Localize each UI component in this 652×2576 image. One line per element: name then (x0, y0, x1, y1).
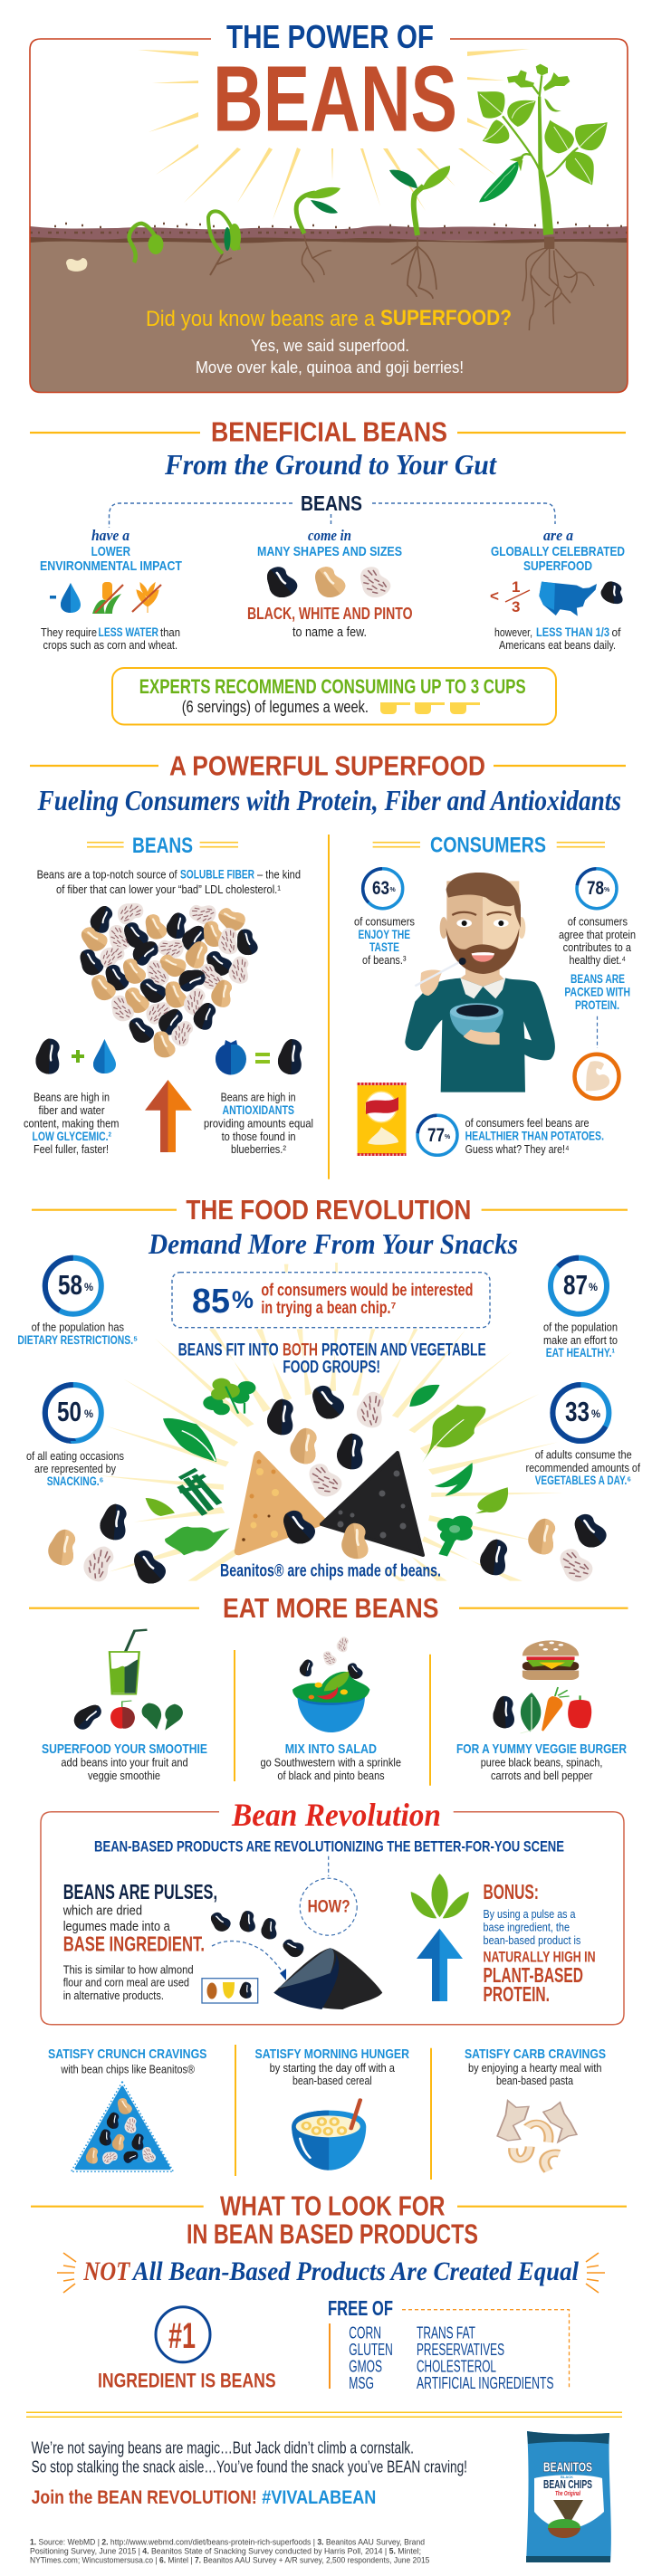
heading rule (30, 765, 626, 767)
column: burger: puree black beans, spinach, (481, 1756, 602, 1770)
stat: 58 percent: % (84, 1281, 93, 1293)
column: burger (456, 1640, 627, 1782)
list: free of: GMOS (349, 2357, 382, 2375)
text: beans are pulses: BEANS ARE PULSES, (63, 1880, 217, 1903)
beans label: BEANS (301, 491, 362, 515)
hero headline (146, 306, 512, 331)
text: bonus: BONUS: (484, 1880, 539, 1903)
column: smoothie (42, 1630, 207, 1782)
column: carb cravings: bean-based pasta (496, 2074, 574, 2087)
icon: tan bean (309, 552, 358, 604)
column: crunch: with bean chips like Beanitos® (61, 2063, 195, 2076)
text: low glycemic (24, 1091, 120, 1156)
heading (187, 2190, 478, 2250)
column: burger: carrots and bell pepper (491, 1769, 593, 1782)
fraction: less than one third: < (490, 587, 499, 605)
icon: broccoli (437, 1516, 473, 1555)
title: the power of: THE POWER OF (226, 18, 434, 55)
column: superfood: are a (543, 527, 573, 544)
icon: crossed corn (92, 582, 123, 614)
stat: 63 percent: of consumers (354, 915, 415, 929)
callout: experts recommend: (6 servings) of legumes a week. (182, 698, 369, 716)
stat: 63 percent: % (389, 887, 397, 893)
stat: 87 percent (543, 1258, 618, 1360)
column: lower impact: LOWER (91, 544, 130, 559)
list: free of: FREE OF (328, 2296, 393, 2320)
section: what to look for (31, 2190, 627, 2392)
subheading: All Bean-Based Products Are Created Equal (131, 2256, 580, 2286)
panel border (41, 1812, 624, 2025)
text: low glycemic: fiber and water (38, 1103, 105, 1117)
callout: 85 percent: of consumers would be interested (261, 1282, 473, 1301)
fraction: less than one third: 3 (512, 598, 520, 615)
stat: 78 percent (559, 869, 636, 1048)
closing text: So stop stalking the snack aisle…You’ve found the snack you’ve BEAN craving! (32, 2458, 467, 2476)
text: beans are pulses: BASE INGREDIENT. (63, 1932, 205, 1956)
text: bonus: PLANT-BASED (484, 1963, 583, 1987)
icon: measuring cups (380, 702, 480, 714)
list: free of: CORN (349, 2323, 381, 2342)
panel title: Bean Revolution (231, 1797, 441, 1833)
panel: consumers (354, 834, 636, 1156)
icon: blueberry equals bean (216, 1032, 310, 1085)
stat: 78 percent: PROTEIN. (575, 998, 619, 1012)
how callout (300, 1856, 357, 1935)
icon: black bean (590, 575, 628, 611)
list: free of: TRANS FAT (417, 2323, 475, 2342)
icon: seed (66, 258, 87, 272)
closing text (32, 2439, 467, 2476)
column: shapes and sizes: MANY SHAPES AND SIZES (257, 544, 402, 559)
text: food groups: PROTEIN AND VEGETABLE (321, 1340, 486, 1360)
stat: 78 percent: healthy diet.⁴ (569, 953, 626, 967)
text: low glycemic: Feel fuller, faster! (34, 1142, 109, 1156)
callout: experts recommend: EXPERTS RECOMMEND CONSUMING UP TO 3 CUPS (139, 675, 526, 698)
subheading: From the Ground to Your Gut (164, 448, 497, 481)
stat: 78 percent: 78 (587, 878, 604, 899)
stat: 87 percent: make an effort to (543, 1333, 618, 1347)
stat: 63 percent: TASTE (369, 940, 399, 954)
icon: sprout 2 (208, 211, 241, 275)
icon: sprout 4 (389, 166, 450, 299)
icon: parsley (203, 1379, 255, 1415)
footer (26, 2412, 622, 2566)
product: bean chip bag: BEANITOS (543, 2460, 592, 2476)
column: superfood: LESS THAN 1/3 (536, 625, 609, 639)
stat: 87 percent: EAT HEALTHY.¹ (546, 1346, 615, 1360)
hero subtext: Yes, we said superfood. (251, 337, 409, 355)
title: beans: BEANS (213, 47, 457, 150)
text: low glycemic: Beans are high in (34, 1091, 110, 1104)
how callout: HOW? (308, 1898, 350, 1917)
stat: 58 percent (17, 1258, 138, 1347)
heading: THE FOOD REVOLUTION (186, 1194, 471, 1226)
text: food groups (178, 1340, 486, 1378)
icon: black bean (62, 1695, 107, 1736)
callout: experts recommend (112, 668, 556, 724)
column: superfood: however, (494, 625, 532, 639)
text: beans are pulses: legumes made into a (63, 1919, 170, 1934)
stat: 50 percent: % (84, 1407, 93, 1420)
column: morning hunger: bean-based cereal (292, 2074, 372, 2087)
footnotes: NYTimes.com; Wincustomersusa.co | 6. Mintel | 7. Beanitos AAU Survey + A/R survey, 2,500 respondents, June 2015 (30, 2556, 429, 2566)
column: shapes and sizes: to name a few. (292, 625, 367, 640)
stat: 50 percent: are represented by (34, 1462, 116, 1475)
column: superfood: of (612, 625, 621, 639)
product: bean chip bag: BLACK (561, 2475, 573, 2479)
column divider (328, 835, 330, 1179)
heading: BENEFICIAL BEANS (211, 415, 447, 447)
column: smoothie: SUPERFOOD YOUR SMOOTHIE (42, 1741, 207, 1757)
fiber text: of fiber that can lower your “bad” LDL cholesterol.¹ (56, 883, 282, 896)
section: a powerful superfood (22, 750, 636, 1179)
stat: 33 percent: 33 (565, 1396, 590, 1427)
fraction: less than one third: 1 (512, 578, 520, 596)
text: beans are pulses: This is similar to how almond (63, 1963, 194, 1977)
icon: black bean (254, 560, 302, 612)
icon: beans to flour (203, 1907, 382, 2009)
stat: 58 percent: 58 (58, 1269, 82, 1301)
chip: tan (235, 1452, 328, 1554)
bean heart (70, 893, 259, 1061)
subheading: NOT (82, 2256, 131, 2286)
icon: bean triangle (71, 2082, 174, 2171)
panel: bean revolution (41, 1797, 624, 2025)
text: bonus: NATURALLY HIGH IN (484, 1950, 596, 1966)
heading: IN BEAN BASED PRODUCTS (187, 2218, 478, 2250)
text: bonus: base ingredient, the (484, 1921, 570, 1934)
stat: 63 percent: ENJOY THE (359, 928, 410, 941)
product: bean chip bag: The Original (555, 2491, 581, 2497)
stat: 50 percent (26, 1385, 124, 1488)
call to action: Join the BEAN REVOLUTION! (32, 2487, 257, 2508)
text: food groups: BOTH (283, 1340, 318, 1360)
icon: black bean (482, 1691, 520, 1737)
column: morning hunger (255, 2046, 409, 2171)
icon: up arrow (145, 1080, 192, 1152)
callout: 85 percent (172, 1273, 490, 1328)
list: free of: PRESERVATIVES (417, 2341, 504, 2359)
column: lower impact: than (160, 625, 180, 639)
icon: cereal bowl (292, 2100, 366, 2171)
stat: 33 percent (525, 1385, 640, 1487)
heading rule (31, 2206, 627, 2208)
text: low glycemic: LOW GLYCEMIC.² (33, 1130, 111, 1143)
text: bonus: PROTEIN. (484, 1982, 550, 2006)
icon: flexed arm (574, 1054, 619, 1099)
hero headline: Did you know beans are a (146, 307, 376, 331)
icon: sprout 3 (296, 187, 340, 282)
stat: 78 percent: % (604, 887, 610, 893)
section: the food revolution (17, 1194, 640, 1599)
stat: 78 percent: BEANS ARE (570, 972, 625, 986)
consumers heading: CONSUMERS (430, 834, 546, 858)
icon: sprout 1 (129, 224, 163, 262)
text: low glycemic: content, making them (24, 1117, 120, 1130)
icon: veggie burger (521, 1640, 591, 1733)
column: superfood: SUPERFOOD (523, 558, 592, 574)
column: crunch: SATISFY CRUNCH CRAVINGS (48, 2046, 206, 2062)
text: bonus (484, 1880, 596, 2006)
illustration: bean chips (235, 1452, 423, 1555)
heading: EAT MORE BEANS (223, 1592, 438, 1624)
stat: 87 percent: 87 (563, 1269, 588, 1301)
column: carb cravings: SATISFY CARB CRAVINGS (465, 2046, 606, 2062)
footnotes: 1. Source: WebMD | 2. http://www.webmd.com/diet/beans-protein-rich-superfoods | 3. Beanitos AAU Survey, Brand (30, 2538, 425, 2548)
heading rule (29, 1608, 628, 1609)
icon: pasta (497, 2101, 577, 2171)
stat: 78 percent: agree that protein (559, 928, 636, 941)
stat: 77 percent: % (445, 1134, 451, 1140)
text: food groups: BEANS FIT INTO (178, 1340, 279, 1360)
call to action: #VIVALABEAN (262, 2487, 376, 2508)
illustration: greens (146, 1379, 508, 1555)
hero subtext (196, 337, 464, 377)
hero subtext: Move over kale, quinoa and goji berries! (196, 358, 464, 377)
stat: 63 percent: 63 (372, 878, 389, 899)
stat: 78 percent: contributes to a (563, 940, 632, 954)
stat: 63 percent (354, 869, 415, 967)
icon: minus water drop (50, 583, 81, 613)
callout: 85 percent: % (232, 1286, 254, 1313)
column: lower impact: crops such as corn and wheat. (43, 638, 177, 652)
stat: 87 percent: of the population (543, 1321, 618, 1334)
panel: hero (30, 18, 628, 393)
fiber text (37, 868, 301, 896)
column: shapes and sizes: come in (308, 527, 351, 544)
icon: ingredient box (202, 1979, 258, 2003)
callout: 85 percent: 85 (192, 1283, 230, 1321)
callout: 85 percent: in trying a bean chip.⁷ (261, 1299, 397, 1318)
footnotes: Positioning Survey, June 2015 | 4. Beanitos State of Snacking Survey conducted by Harris Poll, 2014 | 5. Mintel; (30, 2547, 421, 2557)
column: lower impact: They require (41, 625, 97, 639)
subheading: Demand More From Your Snacks (148, 1227, 518, 1260)
heading rule (30, 432, 626, 434)
column: carb cravings (465, 2046, 606, 2171)
icon: leaves with arrow (411, 1874, 469, 2001)
burst marks (57, 2253, 605, 2293)
beans heading: BEANS (132, 834, 193, 858)
icon: bean plus water (22, 1032, 116, 1084)
product: bean chip bag: BEAN CHIPS (543, 2477, 592, 2491)
column: morning hunger: by starting the day off with a (270, 2061, 396, 2075)
column: salad: of black and pinto beans (277, 1769, 385, 1782)
column: morning hunger: SATISFY MORNING HUNGER (255, 2046, 409, 2062)
icon: asparagus (179, 1469, 219, 1514)
stat: 78 percent: PACKED WITH (564, 986, 630, 999)
section: satisfy cravings (48, 2045, 606, 2180)
column: superfood (490, 527, 628, 652)
icon: green leaf (475, 1487, 508, 1513)
fiber text: – the kind (257, 868, 301, 882)
fraction: less than one third (490, 578, 530, 615)
list: free of: CHOLESTEROL (417, 2357, 496, 2375)
panel: beans (22, 834, 313, 1156)
icon: full bean plant (477, 64, 608, 330)
stat: 58 percent: of the population has (32, 1321, 124, 1334)
badge: number one ingredient (98, 2307, 276, 2391)
column: shapes and sizes (247, 527, 413, 640)
text: beans are pulses: which are dried (62, 1903, 142, 1919)
text: antioxidants: Beans are high in (221, 1091, 296, 1104)
ground soil (30, 223, 628, 393)
list: free of: MSG (349, 2374, 374, 2392)
text: antioxidants: providing amounts equal (204, 1117, 313, 1130)
column: lower impact: ENVIRONMENTAL IMPACT (40, 558, 182, 574)
fiber text: SOLUBLE FIBER (180, 868, 254, 882)
icon: kale leaf (163, 1418, 216, 1462)
column: carb cravings: by enjoying a hearty meal with (468, 2061, 601, 2075)
list: free of (328, 2296, 569, 2392)
text: bonus: bean-based product is (484, 1933, 581, 1947)
text: antioxidants: ANTIOXIDANTS (223, 1103, 294, 1117)
text: beans are pulses: flour and corn meal are used (63, 1976, 189, 1989)
stat: 58 percent: DIETARY RESTRICTIONS.⁵ (17, 1333, 138, 1347)
icon: leaf (409, 1385, 439, 1407)
section: eat more beans (29, 1592, 628, 1786)
list: free of: GLUTEN (349, 2341, 393, 2359)
illustration: man eating beans (405, 873, 555, 1092)
dashed connector (109, 503, 555, 528)
stat: 78 percent: of consumers (568, 915, 628, 929)
footnotes (30, 2538, 429, 2566)
heading: A POWERFUL SUPERFOOD (169, 750, 485, 782)
stat: 77 percent: 77 (427, 1125, 445, 1146)
column: lower impact (40, 527, 182, 652)
stat: 33 percent: of adults consume the (535, 1448, 632, 1462)
closing text: We’re not saying beans are magic…But Jack didn’t climb a cornstalk. (32, 2439, 414, 2457)
column: crunch (48, 2046, 206, 2171)
panel border (30, 39, 628, 393)
stat: 77 percent (417, 1115, 604, 1156)
text: beans are pulses: in alternative products. (63, 1989, 164, 2002)
column: shapes and sizes: BLACK, WHITE AND PINTO (247, 605, 413, 623)
icon: pea pod (435, 1463, 473, 1496)
column: lower impact: have a (91, 527, 129, 544)
text: antioxidants (204, 1091, 313, 1156)
text: food groups: FOOD GROUPS! (283, 1358, 380, 1378)
text: beans are pulses (62, 1880, 217, 2002)
burst rays (96, 1263, 564, 1581)
column: smoothie: veggie smoothie (88, 1769, 160, 1782)
column: salad (261, 1635, 401, 1782)
icon: salad bowl (292, 1672, 369, 1732)
stat: 87 percent: % (589, 1281, 598, 1293)
icon: small leaf (146, 1498, 175, 1516)
chip: black (321, 1453, 423, 1555)
fiber text: Beans are a top-notch source of (37, 868, 177, 882)
stat: 77 percent: of consumers feel beans are (465, 1116, 590, 1130)
heading: WHAT TO LOOK FOR (220, 2190, 446, 2222)
stat: 77 percent: Guess what? They are!⁴ (465, 1142, 570, 1156)
stat: 50 percent: SNACKING.⁶ (47, 1474, 103, 1488)
product: bean chip bag (526, 2431, 611, 2562)
text: antioxidants: blueberries.² (231, 1142, 287, 1156)
column: salad: go Southwestern with a sprinkle (261, 1756, 401, 1770)
column: smoothie: add beans into your fruit and (61, 1756, 188, 1770)
icon: smoothie ingredients (110, 1630, 183, 1731)
icon: chip bag (358, 1084, 406, 1155)
icon: crossed wheat (132, 583, 161, 613)
icon: arugula (165, 1527, 230, 1555)
sun rays (138, 49, 530, 220)
scattered beans (43, 1379, 613, 1599)
section: beneficial beans (30, 415, 628, 724)
text: antioxidants: to those found in (222, 1130, 296, 1143)
heading rule (32, 1209, 628, 1211)
column: superfood: Americans eat beans daily. (499, 638, 616, 652)
stat: 33 percent: % (591, 1407, 600, 1420)
icon: us map (539, 582, 597, 616)
stat: 50 percent: of all eating occasions (26, 1449, 124, 1463)
caption: beanitos: Beanitos® are chips made of beans. (220, 1562, 441, 1581)
stat: 50 percent: 50 (57, 1396, 82, 1427)
icon: spinach leaf (422, 1405, 485, 1463)
hero headline: SUPERFOOD? (380, 306, 512, 330)
icon: falling beans (292, 1635, 366, 1686)
text: bonus: By using a pulse as a (484, 1907, 576, 1921)
stat: 63 percent: of beans.³ (362, 953, 407, 967)
stat: 77 percent: HEALTHIER THAN POTATOES. (465, 1130, 604, 1143)
column: lower impact: LESS WATER (98, 625, 158, 639)
icon: pinto bean (356, 562, 393, 602)
list: free of: ARTIFICIAL INGREDIENTS (417, 2374, 554, 2392)
badge: number one ingredient: INGREDIENT IS BEANS (98, 2369, 276, 2391)
column: salad: MIX INTO SALAD (285, 1741, 377, 1757)
badge: number one ingredient: #1 (168, 2316, 196, 2356)
